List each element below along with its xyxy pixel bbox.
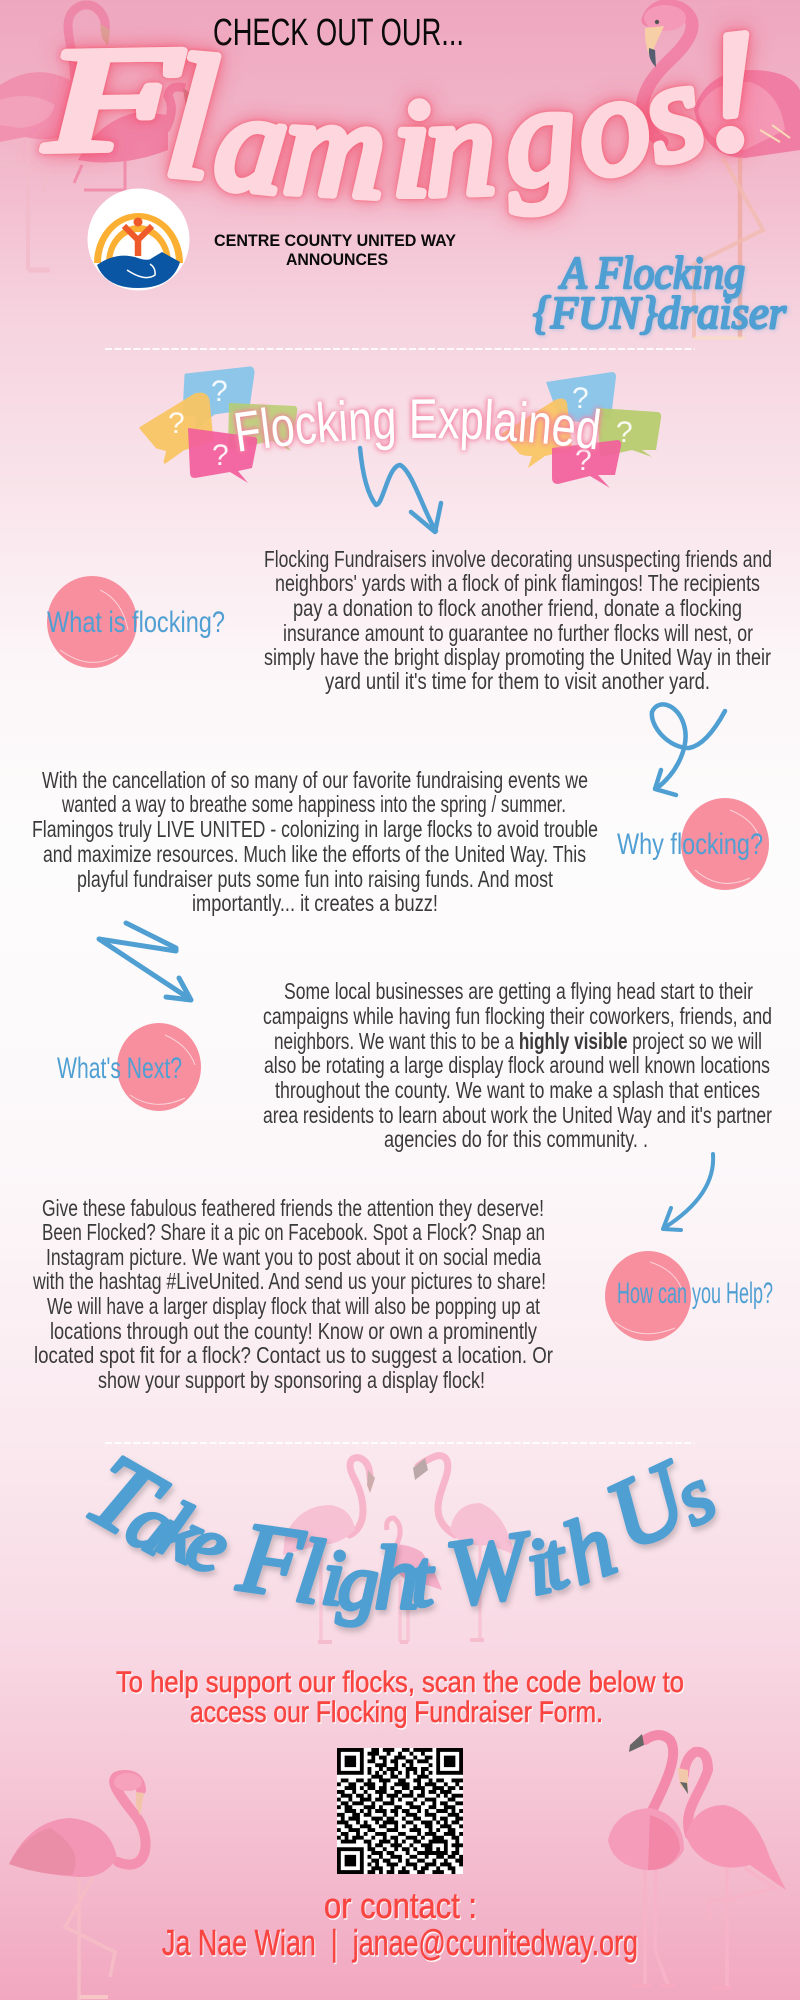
- title: take flight with us: i: [518, 1522, 558, 1613]
- speech bubbles left: ?: [168, 407, 185, 440]
- text: Centre County United Way announces: [214, 231, 457, 269]
- title: take flight with us: a: [114, 1476, 190, 1573]
- text: Centre County United Way announces: CENTRE COUNTY UNITED WAY: [214, 231, 457, 250]
- heading: flocking explained: Flocking Explained: [232, 394, 604, 455]
- speech bubbles left: ?: [212, 439, 229, 472]
- text: how can you help description: Been Flocked? Share it a pic on Facebook. Spot a Flock? Snap an: [42, 1219, 545, 1245]
- title: take flight with us: e: [175, 1497, 241, 1592]
- text: contact details: [162, 1885, 638, 1963]
- text: scan instructions: To help support our flocks, scan the code below to: [116, 1666, 684, 1699]
- text: contact details: Ja Nae Wian | janae@ccunitedway.org: [162, 1922, 638, 1963]
- title: Flamingos!: n: [423, 69, 498, 226]
- text: how can you help description: locations through out the county! Know or own a prominently: [50, 1318, 537, 1344]
- text: why flocking description: With the cancellation of so many of our favorite fundraising events we: [42, 767, 588, 793]
- flamingo: bottom left: [9, 1773, 146, 2000]
- text: how can you help description: We will have a larger display flock that will also be popping up at: [47, 1293, 540, 1319]
- title: take flight with us: h: [551, 1495, 627, 1604]
- flamingos: bottom right pair: [608, 1734, 786, 1988]
- text: Centre County United Way announces: ANNOUNCES: [286, 250, 388, 269]
- title: take flight with us: W: [440, 1510, 541, 1627]
- title: take flight with us: l: [290, 1519, 330, 1623]
- arrow: zigzag to what's next: [99, 923, 191, 1000]
- subtitle: a flocking fundraiser: [533, 247, 787, 338]
- text: what's next description: agencies do for this community. .: [384, 1126, 648, 1152]
- text: flocking description: [264, 546, 772, 694]
- text: how can you help description: Instagram picture. We want you to post about it on social media: [46, 1244, 541, 1270]
- flamingo: top left large: [0, 5, 110, 270]
- label: what's next: What's Next?: [57, 1052, 182, 1085]
- title: take flight with us: g: [336, 1538, 381, 1628]
- speech bubbles right: ?: [616, 416, 633, 449]
- QR code: [337, 1748, 463, 1874]
- title: Flamingos!: s: [626, 30, 719, 194]
- speech bubbles right: [501, 372, 661, 488]
- speech bubbles left: [141, 368, 297, 483]
- title: take flight with us: s: [660, 1451, 729, 1543]
- title: take flight with us: t: [408, 1535, 437, 1624]
- text: what's next description: [263, 978, 772, 1152]
- title: take flight with us: h: [374, 1529, 419, 1628]
- speech bubbles right: ?: [572, 382, 589, 415]
- pre-heading: check out our: CHECK OUT OUR...: [213, 12, 464, 54]
- text: how can you help description: located spot fit for a flock? Contact us to suggest a location. Or: [34, 1342, 553, 1368]
- text: how can you help description: Give these fabulous feathered friends the attention they deserve!: [42, 1195, 544, 1221]
- text: why flocking description: [32, 767, 598, 916]
- title: take flight with us: i: [318, 1533, 348, 1623]
- title: Flamingos!: o: [563, 43, 662, 208]
- flamingo: top right large: [642, 5, 800, 338]
- title: Flamingos!: g: [497, 55, 583, 217]
- text: why flocking description: importantly... it creates a buzz!: [192, 890, 438, 916]
- title: take flight with us: F: [232, 1501, 310, 1619]
- title: Flamingos!: m: [280, 68, 389, 228]
- text: contact details: or contact :: [324, 1885, 477, 1926]
- title: Flamingos!: a: [209, 63, 295, 224]
- flamingos: middle trio: [283, 1456, 515, 1642]
- subtitle: a flocking fundraiser: {FUN}draiser: [533, 287, 787, 338]
- title: Flamingos!: [41, 0, 768, 228]
- title: take flight with us: [68, 1431, 729, 1628]
- text: how can you help description: show your support by sponsoring a display flock!: [98, 1367, 485, 1393]
- title: Flamingos!: l: [159, 19, 224, 217]
- label: how can you help: [605, 1251, 773, 1341]
- arrow: loop to why flocking: [652, 704, 725, 795]
- speech bubbles left: ?: [211, 375, 228, 408]
- label: why flocking: Why flocking?: [617, 828, 763, 861]
- text: why flocking description: playful fundraiser puts some fun into raising funds. And most: [77, 866, 553, 892]
- text: how can you help description: [32, 1195, 553, 1393]
- text: flocking description: yard until it's time for them to visit another yard.: [325, 668, 710, 694]
- flamingo: top left small: [74, 87, 192, 190]
- text: scan instructions: access our Flocking Fundraiser Form.: [190, 1696, 603, 1729]
- title: take flight with us: k: [146, 1486, 217, 1581]
- text: how can you help description: with the hashtag #LiveUnited. And send us your pictures to share!: [32, 1268, 546, 1294]
- title: take flight with us: U: [590, 1438, 708, 1572]
- label: why flocking: [617, 798, 769, 890]
- label: what is flocking: [47, 576, 225, 668]
- speech bubbles right: ?: [575, 444, 592, 477]
- text: scan instructions: [116, 1666, 684, 1729]
- text: why flocking description: and maximize resources. Much like the efforts of the United Way. This: [43, 841, 586, 867]
- arrow: squiggle to first text: [360, 448, 441, 532]
- label: what's next: [57, 1023, 201, 1111]
- text: why flocking description: wanted a way to breathe some happiness into the spring / summer.: [61, 791, 566, 817]
- title: take flight with us: T: [68, 1431, 183, 1564]
- logo: United Way: [88, 188, 190, 290]
- subtitle: a flocking fundraiser: A Flocking: [558, 247, 745, 298]
- text: what's next description: neighbors. We want this to be a highly visible project so we will: [274, 1028, 762, 1054]
- label: what is flocking: What is flocking?: [47, 606, 225, 639]
- title: Flamingos!: F: [41, 16, 184, 182]
- arrow: curve to how can you help: [663, 1154, 713, 1230]
- text: why flocking description: Flamingos truly LIVE UNITED - colonizing in large flocks to avoid trouble: [32, 816, 598, 842]
- title: take flight with us: t: [532, 1516, 578, 1607]
- title: Flamingos!: i: [392, 71, 431, 226]
